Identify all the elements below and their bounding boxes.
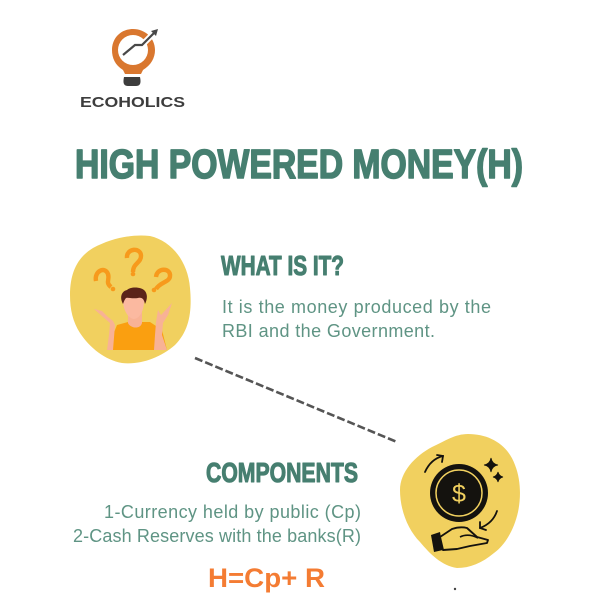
question marks	[96, 250, 170, 289]
small dot	[454, 588, 456, 590]
heading: what is it: WHAT IS IT?	[221, 250, 344, 281]
icon: confused person on yellow blob	[70, 236, 191, 363]
icon: light bulb with rising chart	[112, 29, 158, 86]
components list: 1-Currency held by public (Cp)	[104, 502, 361, 522]
formula: H=Cp+ R	[208, 563, 325, 593]
definition text: It is the money produced by the	[222, 297, 491, 317]
sparkles	[484, 458, 498, 472]
definition text: RBI and the Government.	[222, 321, 435, 341]
components list	[73, 502, 361, 546]
person	[94, 287, 172, 350]
yellow blob	[70, 236, 191, 363]
coin: $	[452, 480, 466, 508]
definition text	[222, 297, 491, 341]
logo wordmark: ECOHOLICS	[80, 94, 185, 111]
dashed connector line	[195, 358, 397, 442]
circular arrows	[425, 455, 497, 530]
hand	[431, 527, 488, 552]
icon: coin over hand on yellow blob	[400, 434, 520, 568]
yellow blob	[400, 434, 520, 568]
logo: Ecoholics	[80, 29, 185, 111]
heading: components: COMPONENTS	[206, 457, 358, 488]
components list: 2-Cash Reserves with the banks(R)	[73, 526, 361, 546]
